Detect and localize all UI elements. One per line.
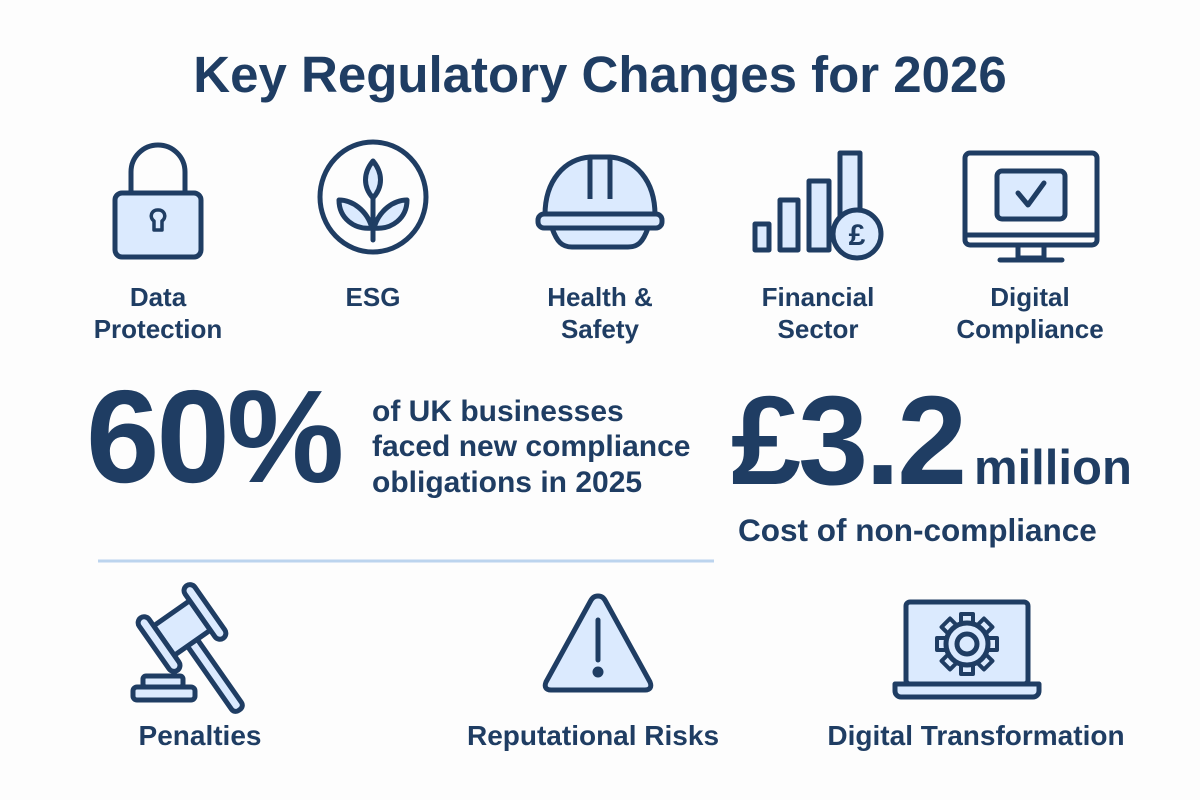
title: Key Regulatory Changes for 2026 <box>193 46 1007 103</box>
top labels: ESG <box>346 282 400 312</box>
stat text: UK businesses <box>372 395 690 499</box>
bottom labels: Penalties <box>139 720 261 751</box>
top labels: Protection <box>94 314 222 344</box>
icon: lock <box>115 145 201 257</box>
stat: £3.2 million: million <box>974 441 1132 495</box>
bottom labels: Digital Transformation <box>827 720 1125 751</box>
stat: £3.2 million <box>731 370 1132 511</box>
icon: warning triangle <box>545 596 651 690</box>
top labels: Financial <box>762 282 874 312</box>
icon: laptop gear <box>895 602 1039 697</box>
stat text: UK businesses: obligations in 2025 <box>372 466 642 499</box>
top labels: Safety <box>561 314 640 344</box>
top labels: Health & <box>547 282 653 312</box>
stat text: cost: Cost of non-compliance <box>738 512 1097 548</box>
top labels: Compliance <box>956 314 1104 344</box>
top labels: Sector <box>778 314 858 344</box>
stat text: UK businesses: of UK businesses <box>372 395 624 428</box>
top labels: Digital <box>990 282 1070 312</box>
icon: monitor check <box>965 153 1097 260</box>
top labels: Data <box>130 282 187 312</box>
icon: ESG leaf <box>320 142 426 252</box>
top labels <box>94 282 1104 344</box>
stat text: UK businesses: faced new compliance <box>372 430 690 463</box>
icon: financial chart <box>755 153 881 258</box>
icon: gavel <box>133 582 267 729</box>
icon: hard hat <box>538 157 662 247</box>
bottom labels <box>139 720 1125 751</box>
bottom labels: Reputational Risks <box>467 720 719 751</box>
icon: financial chart: £ <box>849 219 866 252</box>
stat: £3.2 million: £3.2 <box>731 370 964 511</box>
stat: 60%: 60% <box>86 363 341 510</box>
